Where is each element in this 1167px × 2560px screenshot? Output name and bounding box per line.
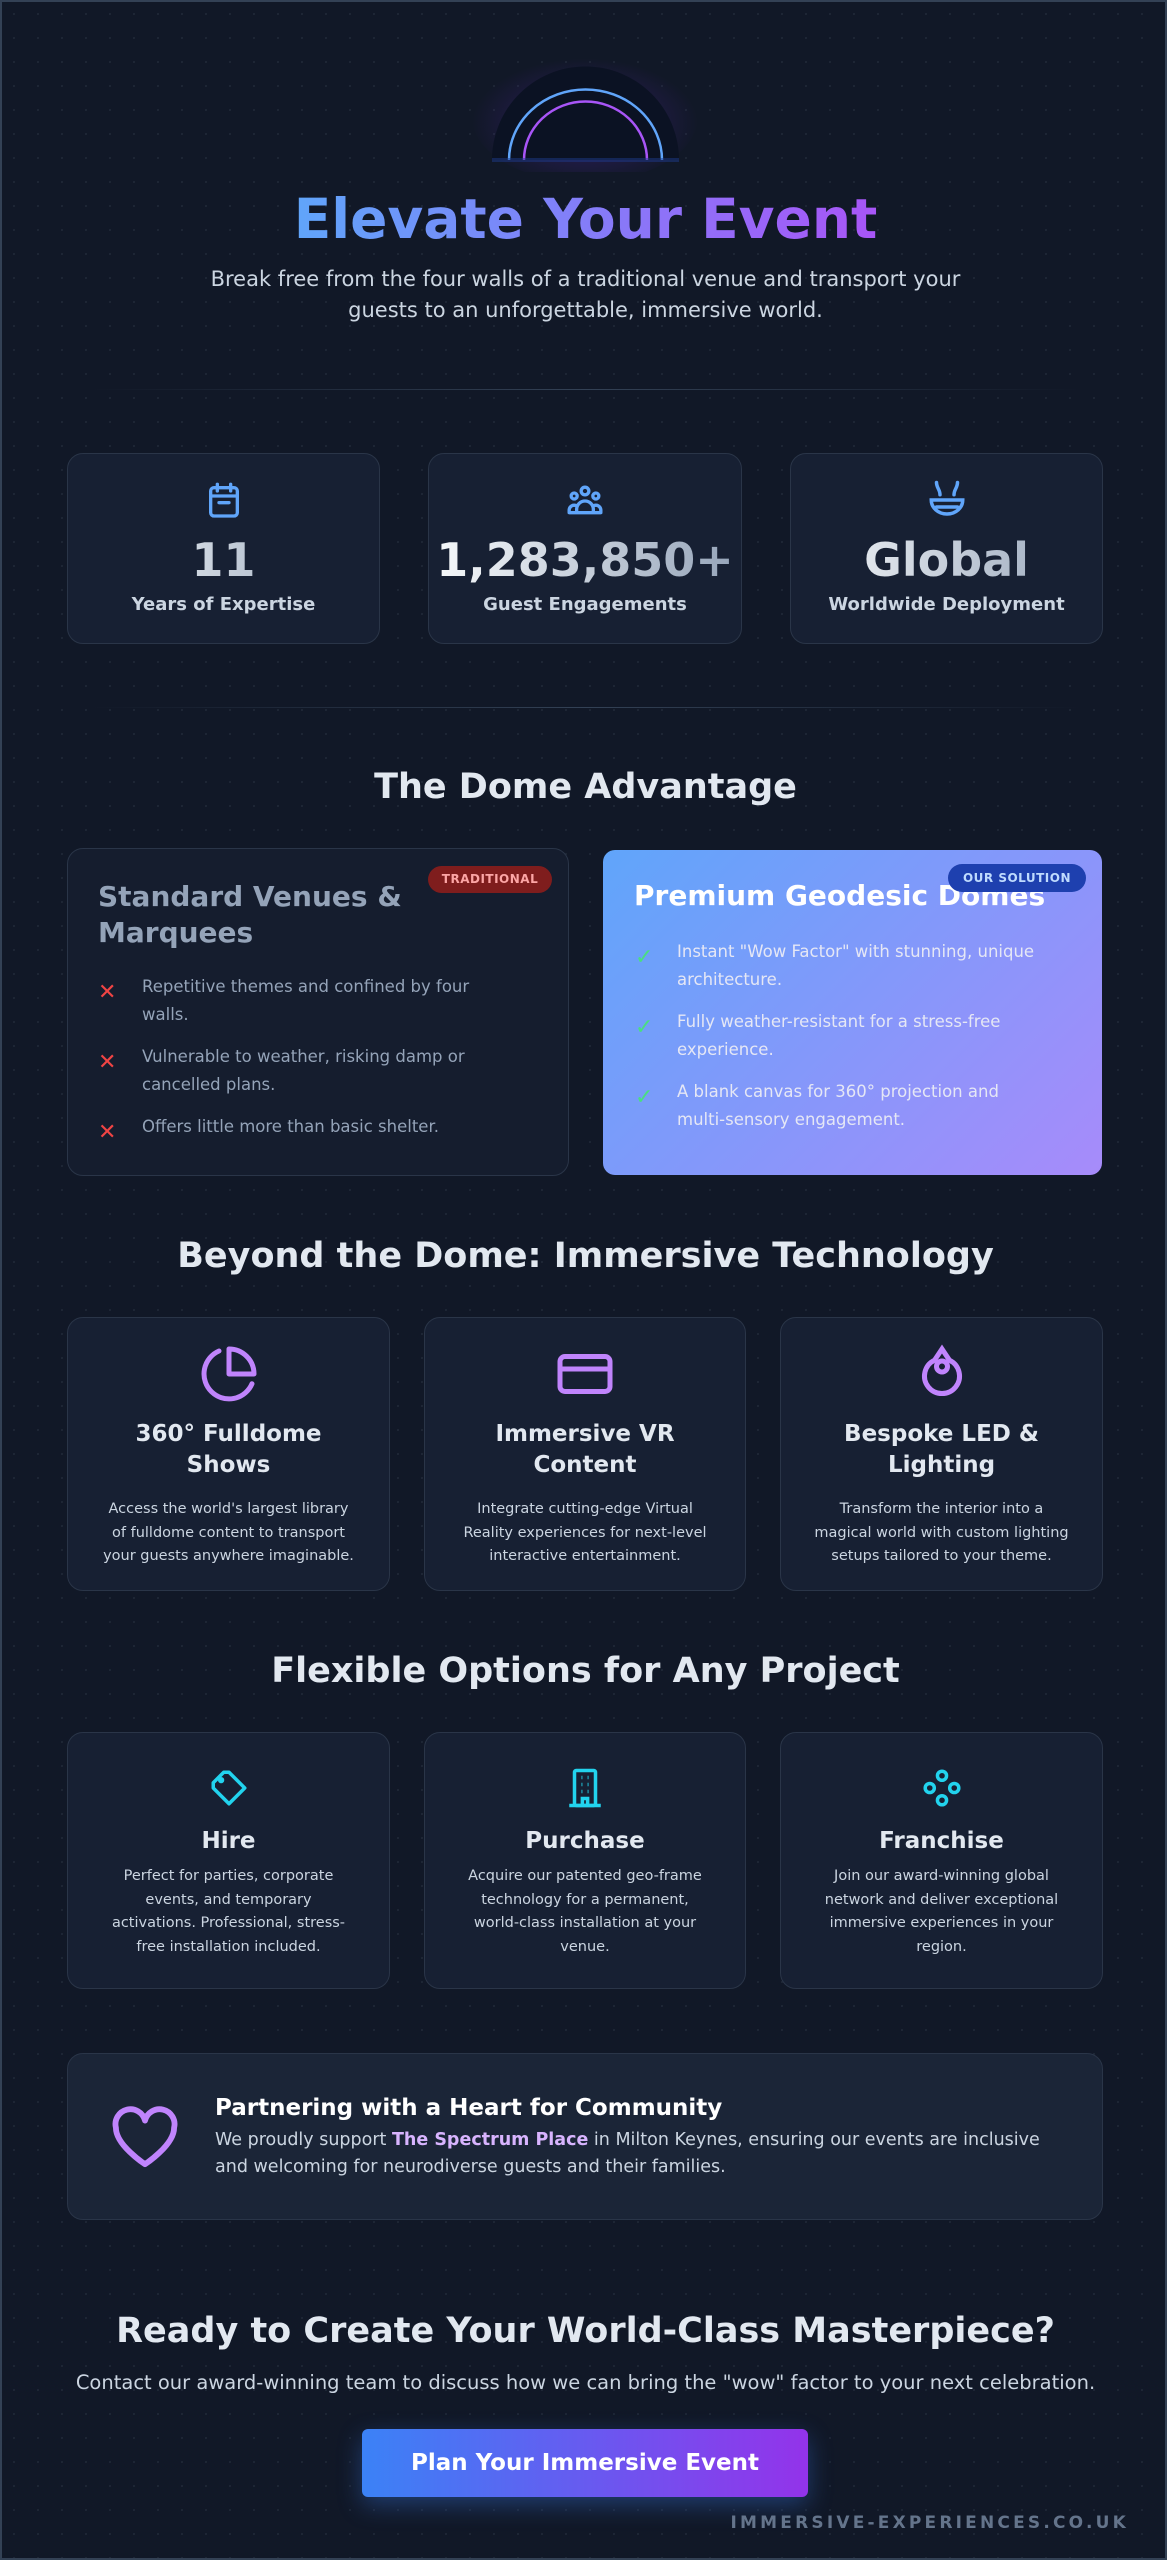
card text: Perfect for parties, corporate [124, 1868, 333, 1884]
list: benefits: Fully weather-resistant for a stress-free [677, 1012, 1000, 1031]
card title: Purchase [525, 1828, 645, 1854]
icon: dome logo [486, 68, 683, 172]
card title: Content [533, 1452, 637, 1478]
card title: Franchise [879, 1828, 1004, 1854]
stat label: Years of Expertise [132, 594, 315, 615]
card text: technology for a permanent, [481, 1892, 689, 1908]
icon: building [569, 1768, 601, 1808]
heading: beyond the dome: Beyond the Dome: Immersive Technology [177, 1236, 994, 1276]
icon: drop [922, 1344, 962, 1396]
card title [135, 1421, 322, 1478]
card title: Bespoke LED & [844, 1421, 1039, 1447]
list: drawbacks: Vulnerable to weather, risking damp or [142, 1047, 465, 1066]
card text: magical world with custom lighting [814, 1524, 1069, 1540]
card text: events, and temporary [145, 1892, 312, 1908]
community text [215, 2130, 1040, 2177]
card text: Reality experiences for next-level [463, 1524, 707, 1540]
stat number [791, 532, 1102, 588]
list: benefits: Instant "Wow Factor" with stunning, unique [677, 942, 1034, 961]
badge: traditional: TRADITIONAL [442, 872, 538, 886]
card title: Immersive VR [495, 1421, 675, 1447]
panel: vr [424, 1317, 746, 1591]
icon: heart [112, 2106, 178, 2168]
list: benefits: ✓ [635, 1015, 653, 1040]
stat number: 1,283,850+ [436, 533, 734, 587]
panel: traditional [67, 848, 569, 1176]
stat label: Guest Engagements [483, 594, 687, 615]
card title [844, 1421, 1039, 1478]
list: benefits: A blank canvas for 360° projection and [677, 1082, 999, 1101]
badge: our solution [948, 864, 1086, 892]
button: plan event [362, 2429, 808, 2497]
list: benefits: experience. [677, 1040, 774, 1059]
heading: standard venues: Standard Venues & Marquees [98, 880, 402, 949]
card text: Access the world's largest library [108, 1501, 348, 1517]
panel: community [67, 2053, 1103, 2220]
icon: card [558, 1354, 612, 1394]
heading: cta: Ready to Create Your World-Class Masterpiece? [116, 2311, 1055, 2351]
card text: world-class installation at your [474, 1915, 696, 1931]
list: drawbacks: cancelled plans. [142, 1075, 275, 1094]
list: drawbacks: walls. [142, 1005, 189, 1024]
panel: fulldome [67, 1317, 390, 1591]
card text: Integrate cutting-edge Virtual [477, 1501, 693, 1517]
list: drawbacks: Repetitive themes and confined by four [142, 977, 469, 996]
badge: traditional [428, 866, 552, 893]
card text: activations. Professional, stress- [112, 1915, 345, 1931]
list: drawbacks: ✕ [98, 1120, 116, 1145]
panel: stat years [67, 453, 380, 644]
list: benefits: architecture. [677, 970, 782, 989]
stat number: Global [864, 533, 1029, 587]
subtitle [211, 267, 960, 322]
card title: Hire [201, 1828, 256, 1854]
badge: our solution: OUR SOLUTION [963, 871, 1071, 885]
list: drawbacks [98, 977, 470, 1145]
subtitle: Break free from the four walls of a traditional venue and transport your [211, 267, 960, 291]
subtitle: guests to an unforgettable, immersive world. [348, 298, 823, 322]
community text: and welcoming for neurodiverse guests and their families. [215, 2157, 726, 2177]
panel: led [780, 1317, 1103, 1591]
heading: flexible options: Flexible Options for Any Project [271, 1651, 900, 1691]
icon: network [923, 1770, 961, 1806]
card text [825, 1868, 1058, 1954]
card text: Acquire our patented geo-frame [468, 1868, 702, 1884]
icon: bowl [930, 480, 964, 516]
card text: venue. [560, 1938, 610, 1954]
button: plan event: Plan Your Immersive Event [411, 2450, 759, 2476]
community text: We proudly support The Spectrum Place in Milton Keynes, ensuring our events are inclusive [215, 2130, 1040, 2150]
card text [463, 1501, 707, 1564]
cta text: Contact our award-winning team to discuss how we can bring the "wow" factor to your next celebration. [76, 2371, 1095, 2394]
list: drawbacks: Offers little more than basic shelter. [142, 1117, 439, 1136]
icon: users [568, 486, 602, 514]
card text: your guests anywhere imaginable. [103, 1548, 354, 1564]
card title: 360° Fulldome [135, 1421, 322, 1447]
card title [495, 1421, 675, 1478]
card text: network and deliver exceptional [825, 1892, 1058, 1908]
panel: our solution [603, 850, 1102, 1175]
card text [103, 1501, 354, 1564]
list: benefits: multi-sensory engagement. [677, 1110, 905, 1129]
card text: of fulldome content to transport [112, 1524, 345, 1540]
card text: immersive experiences in your [830, 1915, 1053, 1931]
panel: stat global [790, 453, 1103, 644]
stat number [68, 532, 379, 588]
community title: Partnering with a Heart for Community [215, 2095, 722, 2121]
card title: Shows [187, 1452, 270, 1478]
panel: hire [67, 1732, 390, 1989]
card text: Join our award-winning global [834, 1868, 1049, 1884]
list: benefits: ✓ [635, 1085, 653, 1110]
stat number: 11 [191, 533, 256, 587]
panel: purchase [424, 1732, 746, 1989]
card text [468, 1868, 702, 1954]
list: drawbacks: ✕ [98, 1050, 116, 1075]
icon: pie chart [202, 1346, 256, 1402]
title: Elevate Your Event [294, 187, 877, 251]
card text [112, 1868, 345, 1954]
list: drawbacks: ✕ [98, 980, 116, 1005]
card text: Transform the interior into a [840, 1501, 1043, 1517]
heading: the dome advantage: The Dome Advantage [374, 767, 797, 807]
footer url: IMMERSIVE-EXPERIENCES.CO.UK [731, 2513, 1129, 2533]
panel: franchise [780, 1732, 1103, 1989]
card text [814, 1501, 1069, 1564]
card title: Lighting [888, 1452, 995, 1478]
panel: stat guests [428, 453, 742, 644]
card text: free installation included. [136, 1938, 321, 1954]
heading: premium domes: Premium Geodesic Domes [634, 879, 1045, 912]
card text: region. [916, 1938, 967, 1954]
card text: interactive entertainment. [489, 1548, 681, 1564]
icon: calendar [209, 482, 239, 518]
icon: tag [212, 1770, 247, 1806]
card text: setups tailored to your theme. [831, 1548, 1052, 1564]
list: benefits: ✓ [635, 945, 653, 970]
stat label: Worldwide Deployment [828, 594, 1065, 615]
list: benefits [635, 942, 1034, 1129]
